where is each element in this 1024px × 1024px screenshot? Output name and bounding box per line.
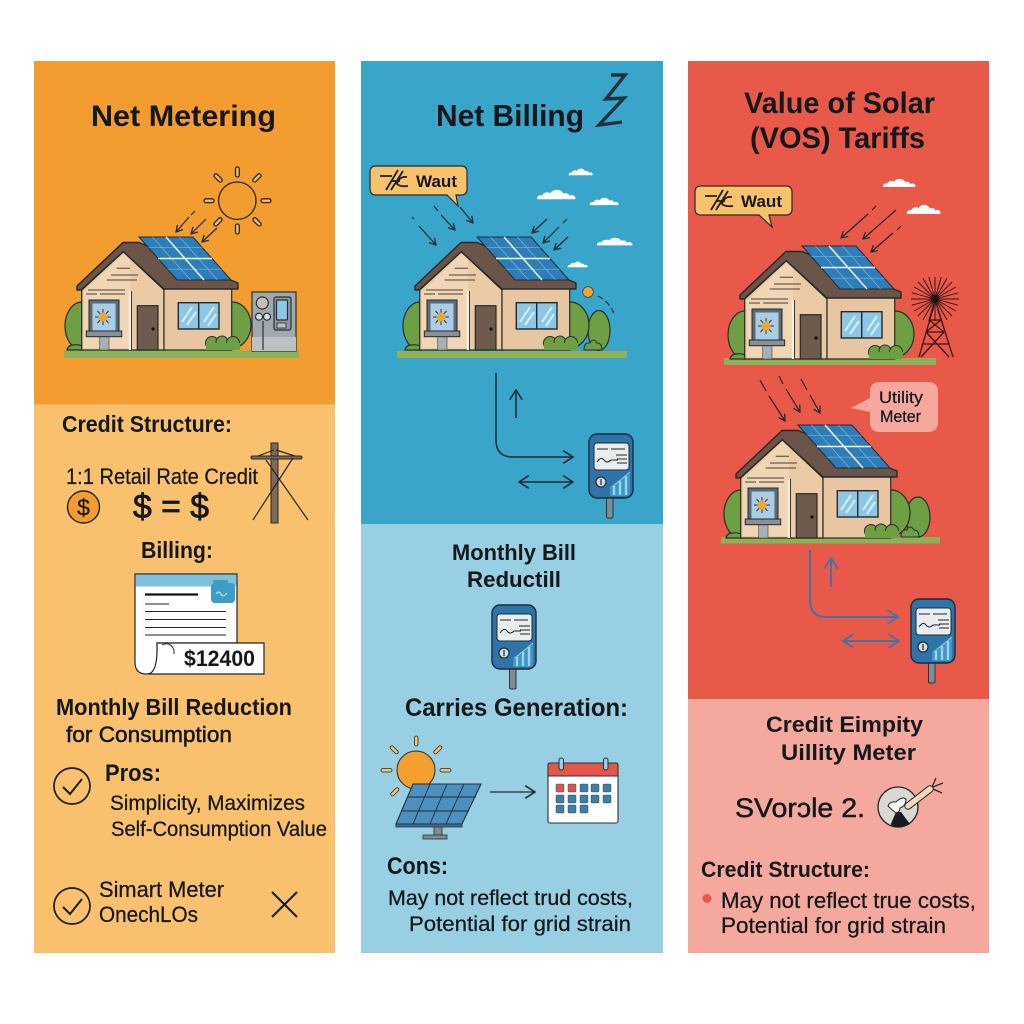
icon: bill document with amount: $12400: [184, 646, 255, 671]
icon: dollar coin: $: [77, 494, 90, 520]
heading: Monthly bill: Monthly Bill: [452, 540, 576, 565]
text: credit structure detail: Potential for grid strain: [721, 913, 946, 938]
title: Value of Solar (VOS) Tariffs: [744, 87, 935, 155]
icon: sun behind solar panel: [381, 736, 481, 839]
heading: Credit Structure: Credit Structure:: [701, 857, 870, 882]
icon: transmission tower with burst: [911, 277, 959, 357]
panel background: light blue body: [361, 524, 663, 953]
icon: small bush: [584, 340, 602, 350]
callout: Utility Meter: Utility: [879, 388, 924, 407]
title: Net Billing: Net Billing: [436, 98, 584, 133]
arrows: sunlight onto roof: [176, 211, 217, 242]
icon: cross mark: [272, 892, 297, 917]
clouds: [883, 179, 940, 214]
heading: Monthly bill: Reductill: [467, 567, 561, 592]
arrow: flow from house to meter: [496, 373, 573, 457]
icon: wrench in circle: [878, 778, 943, 827]
text: smart meter note: Simart Meter: [99, 877, 224, 902]
text: smart meter note: [99, 877, 224, 927]
text: pros detail: Simplicity, Maximizes: [110, 792, 305, 815]
text: cons detail: [388, 887, 633, 936]
text: credit structure detail: [721, 888, 976, 938]
heading: Credit utility meter: [766, 712, 924, 765]
heading: Monthly bill reduction: for Consumption: [66, 722, 232, 747]
text: smart meter note: OnechLOs: [99, 902, 198, 927]
callout: Utility Meter: Meter: [880, 407, 921, 426]
icon: check mark: [54, 768, 90, 804]
icon: lightning bolt: [599, 75, 625, 125]
panel background: orange header: [34, 61, 335, 404]
ground: [397, 351, 627, 358]
heading: Cons: Cons:: [387, 853, 448, 880]
panel background: light red body: [688, 699, 989, 953]
panel: Value of Solar Tariffs: [688, 61, 989, 953]
arrow: two-way: [519, 481, 573, 483]
ground: [64, 350, 299, 358]
panel background: blue header: [361, 61, 663, 524]
arrow: two-way: [843, 640, 899, 642]
callout: Utility Meter: [851, 382, 938, 432]
ground: [724, 358, 936, 365]
heading: Credit utility meter: Uillity Meter: [781, 740, 916, 765]
callout: Waut: Waut: [416, 172, 457, 191]
icon: sun with rays: [204, 167, 271, 234]
title: Value of Solar (VOS) Tariffs: (VOS) Tariffs: [750, 122, 925, 155]
heading: Monthly bill reduction: [56, 694, 292, 747]
heading: Credit utility meter: Credit Eimpity: [766, 712, 924, 737]
text: Svorole 2: SVorɔle 2.: [735, 793, 865, 823]
arrow: up: [830, 558, 832, 587]
panel: Net Metering: [34, 61, 335, 953]
icon: second tree: [906, 497, 930, 537]
text: dollar equals dollar: $ = $: [133, 488, 209, 526]
arrows: sunlight onto second roof: [760, 376, 820, 421]
arrows: sunlight onto house: [412, 206, 568, 250]
arrow: carry forward: [490, 791, 535, 793]
icon: smart meter: [589, 434, 633, 518]
text: pros detail: Self-Consumption Value: [111, 818, 327, 841]
icon: house with solar panels: [728, 246, 914, 359]
icon: bill document with amount: [135, 574, 264, 674]
heading: Credit Structure: Credit Structure:: [62, 411, 232, 437]
panel: Net Billing: [361, 61, 663, 953]
callout: Waut: [695, 186, 792, 227]
text: credit structure detail: May not reflect true costs,: [721, 888, 976, 913]
heading: Monthly bill reduction: Monthly Bill Reduction: [56, 694, 292, 720]
text: 1:1 retail rate credit: 1:1 Retail Rate Credit: [66, 464, 258, 489]
heading: Monthly bill: [452, 540, 576, 592]
icon: small bush: [901, 527, 919, 537]
panel background: red header: [688, 61, 989, 699]
icon: small sun with dashed path: [583, 287, 615, 316]
icon: smart meter: [911, 599, 955, 683]
heading: Billing: Billing:: [141, 537, 213, 563]
icon: utility meter cabinet: [252, 292, 296, 351]
icon: smart meter: [492, 605, 536, 689]
text: pros detail: [110, 792, 327, 841]
panel background: light orange body: [34, 404, 335, 953]
icon: dollar coin: [68, 491, 100, 523]
callout: Waut: Waut: [741, 192, 782, 211]
icon: calendar: [548, 758, 618, 823]
text: cons detail: Potential for grid strain: [409, 913, 631, 936]
icon: house with solar panels: [724, 425, 910, 538]
callout: Waut: [370, 166, 467, 206]
title: Net Metering: Net Metering: [91, 100, 276, 133]
arrows: sunlight onto roof: [841, 206, 901, 252]
icon: utility pole: [251, 443, 308, 523]
heading: Pros: Pros:: [105, 760, 161, 787]
icon: house with solar panels: [403, 237, 589, 350]
icon: bullet: [702, 894, 712, 903]
text: cons detail: May not reflect trud costs,: [388, 887, 633, 910]
icon: second tree: [588, 310, 610, 350]
arrow: flow from house to meter: [810, 550, 898, 617]
arrow: up: [515, 390, 517, 418]
icon: house with solar panels: [65, 237, 251, 350]
clouds: [537, 169, 632, 267]
ground: [721, 537, 940, 544]
title: Value of Solar (VOS) Tariffs: Value of Solar: [744, 87, 935, 120]
heading: Carries Generation: Carries Generation:: [405, 694, 628, 722]
icon: check mark: [54, 888, 90, 924]
